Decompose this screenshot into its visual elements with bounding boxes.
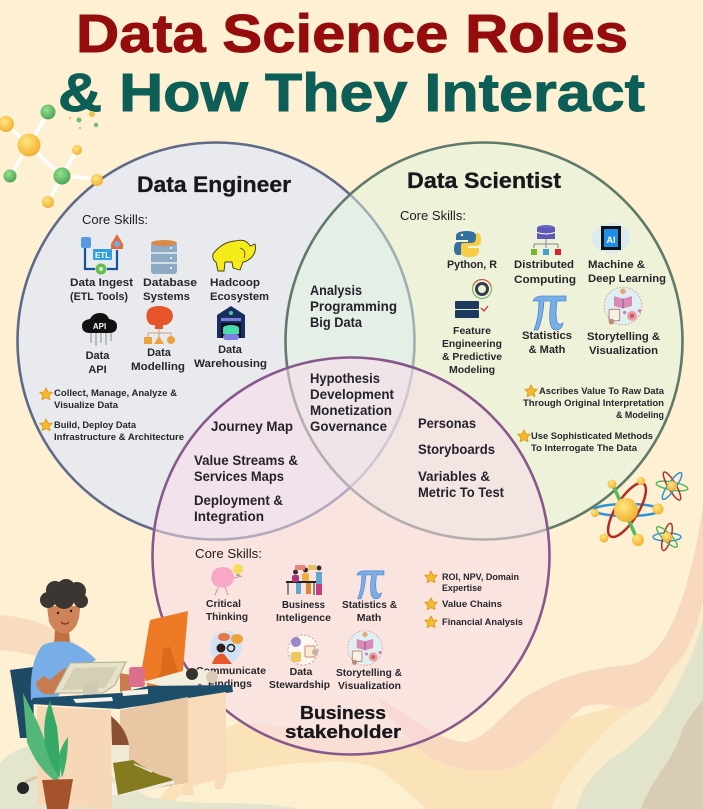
- overlap text: engineer and scientist: [310, 283, 397, 330]
- overlap text: scientist and business: Personas: [418, 416, 476, 431]
- icon: storytelling: [604, 287, 642, 325]
- label: statistics and math: & Math: [529, 344, 566, 356]
- panel: data scientist circle: [286, 142, 682, 540]
- label: storytelling and visualization: [336, 667, 402, 692]
- bullets: data scientist: Use Sophisticated Methods: [531, 431, 653, 442]
- chair: [10, 667, 34, 738]
- panel: data engineer circle: [18, 142, 414, 540]
- label: hadoop: [210, 277, 269, 303]
- bullets: data scientist: & Modeling: [616, 410, 664, 421]
- heading: business stakeholder: [285, 703, 401, 742]
- overlap text: engineer and scientist: Analysis: [310, 283, 362, 298]
- cables and accessories: [143, 669, 214, 688]
- label: storytelling and visualization: Storytelling &: [587, 331, 660, 343]
- label: data api: API: [88, 364, 107, 376]
- overlap text: engineer and scientist: Programming: [310, 299, 397, 314]
- face: [47, 606, 80, 633]
- icon: communicate findings: [210, 631, 243, 664]
- overlap text: all three roles: Hypothesis: [310, 371, 380, 386]
- heading: core skills: Core Skills:: [82, 212, 148, 227]
- icon: data modelling: [144, 306, 175, 344]
- icon: storytelling: [348, 631, 382, 665]
- bullets: data scientist: To Interrogate The Data: [531, 443, 638, 454]
- label: data api: [86, 350, 110, 376]
- heading: core skills: Core Skills:: [400, 208, 466, 223]
- label: data modelling: Data: [147, 347, 172, 359]
- icon: feature engineering: [455, 280, 492, 318]
- label: data stewardship: Data: [290, 666, 313, 678]
- icon: data stewardship: [288, 635, 318, 665]
- label: data ingest: Data Ingest: [70, 277, 133, 289]
- heading: data scientist: Data Scientist: [407, 168, 562, 193]
- desk screen: [54, 662, 126, 693]
- bullets: business stakeholder: Financial Analysis: [442, 617, 523, 628]
- label: communicate findings: [196, 665, 266, 690]
- overlap text: scientist and business: [418, 416, 504, 500]
- label: feature engineering: [442, 325, 502, 376]
- bullets: data engineer: Collect, Manage, Analyze &: [54, 388, 177, 399]
- label: feature engineering: & Predictive: [442, 351, 502, 363]
- bullets: data scientist: Ascribes Value To Raw Data: [539, 386, 665, 397]
- mug: [129, 667, 145, 687]
- label: critical thinking: [206, 598, 248, 623]
- label: critical thinking: Critical: [206, 598, 241, 610]
- label: feature engineering: Engineering: [442, 338, 502, 350]
- icon: pi symbol: [533, 296, 566, 330]
- neck: [54, 630, 70, 645]
- overlap text: engineer and business: Integration: [194, 509, 264, 524]
- label: communicate findings: Communicate: [196, 665, 266, 677]
- label: storytelling and visualization: Visualization: [589, 345, 658, 357]
- overlap text: engineer and business: Services Maps: [194, 469, 284, 484]
- label: machine and deep learning: Deep Learning: [588, 273, 666, 285]
- overlap text: engineer and business: Value Streams &: [194, 453, 298, 468]
- title: Data Science Roles: [76, 5, 628, 64]
- label: python r: Python, R: [447, 259, 497, 271]
- label: distributed computing: Distributed: [514, 259, 574, 271]
- overlap text: engineer and business: Deployment &: [194, 493, 283, 508]
- label: feature engineering: Modeling: [449, 364, 495, 376]
- label: data stewardship: [269, 666, 330, 691]
- overlap text: all three roles: Development: [310, 387, 394, 402]
- label: statistics and math: Math: [357, 612, 381, 624]
- label: business intelligence: Inteligence: [276, 612, 331, 624]
- illustration: person at desk: [10, 579, 233, 809]
- overlap text: engineer and scientist: Big Data: [310, 315, 362, 330]
- icon: data warehouse: [217, 306, 245, 340]
- title: & How They Interact: [58, 64, 645, 123]
- label: distributed computing: Computing: [514, 274, 576, 286]
- label: data warehousing: [194, 344, 267, 370]
- icon: business intelligence: [286, 565, 322, 595]
- icon: API cloud: API: [93, 322, 106, 331]
- label: data api: Data: [86, 350, 110, 362]
- overlap text: scientist and business: Storyboards: [418, 442, 495, 457]
- icon: database: [151, 240, 177, 274]
- leg: [111, 716, 129, 745]
- label: storytelling and visualization: Storytelling &: [336, 667, 402, 679]
- label: machine and deep learning: [588, 259, 666, 285]
- label: storytelling and visualization: Visualization: [338, 680, 401, 692]
- title: [58, 5, 645, 123]
- label: data warehousing: Data: [218, 344, 243, 356]
- label: data ingest: [70, 277, 133, 303]
- overlap text: all three roles: Governance: [310, 419, 387, 434]
- icon: atoms right: [591, 470, 688, 552]
- back monitor: [142, 611, 188, 688]
- desk left panel: [37, 706, 112, 809]
- label: data modelling: [131, 347, 185, 373]
- icon: AI chip: [592, 223, 630, 253]
- label: data modelling: Modelling: [131, 361, 185, 373]
- heading: core skills: Core Skills:: [195, 546, 262, 561]
- plant: [23, 693, 58, 782]
- bullets: business stakeholder: Value Chains: [442, 599, 502, 610]
- label: critical thinking: Thinking: [206, 611, 248, 623]
- bullets: business stakeholder: ROI, NPV, Domain: [442, 572, 519, 583]
- desk right panel: [183, 692, 226, 795]
- overlap text: engineer and business: Journey Map: [211, 419, 293, 434]
- label: distributed computing: [514, 259, 576, 286]
- overlap text: all three roles: Monetization: [310, 403, 392, 418]
- arm: [36, 668, 72, 694]
- label: statistics and math: Statistics &: [342, 599, 397, 611]
- bullets: data engineer: Infrastructure & Architecture: [54, 432, 184, 443]
- label: machine and deep learning: Machine &: [588, 259, 645, 271]
- second shoe: [112, 783, 122, 795]
- shoe: [113, 760, 174, 795]
- heading: data engineer: Data Engineer: [137, 172, 291, 197]
- label: statistics and math: [522, 330, 572, 356]
- label: database systems: Systems: [143, 291, 190, 303]
- bullets: data engineer: Visualize Data: [54, 400, 119, 411]
- label: statistics and math: Statistics: [522, 330, 572, 342]
- label: communicate findings: Findings: [208, 678, 252, 690]
- icon: critical thinking: [211, 564, 243, 595]
- label: storytelling and visualization: [587, 331, 660, 357]
- background waves: [0, 507, 703, 809]
- icon: distributed computing: [531, 225, 561, 255]
- label: hadoop: Ecosystem: [210, 291, 269, 303]
- bullets: data engineer: Build, Deploy Data: [54, 420, 137, 431]
- icon: ETL: ETL: [95, 251, 110, 260]
- icon: AI chip: AI: [606, 235, 616, 245]
- icon: pi symbol: [357, 571, 384, 599]
- label: data ingest: (ETL Tools): [70, 291, 128, 303]
- overlap text: engineer and business: [194, 419, 298, 524]
- heading: business stakeholder: stakeholder: [285, 722, 401, 742]
- icon: API cloud: [82, 313, 117, 346]
- bullets: data engineer: [40, 388, 184, 443]
- label: hadoop: Hadcoop: [210, 277, 260, 289]
- bullets: data scientist: Through Original Interpretation: [523, 398, 664, 409]
- icon: python: [454, 231, 481, 257]
- overlap text: scientist and business: Variables &: [418, 469, 490, 484]
- overlap text: all three roles: [310, 371, 394, 434]
- heading: business stakeholder: Business: [300, 703, 386, 723]
- label: database systems: Database: [143, 277, 197, 289]
- shirt: [31, 641, 96, 700]
- icon: ETL: [81, 234, 123, 274]
- desk top: [31, 685, 233, 709]
- panel: business stakeholder circle: [152, 358, 550, 754]
- label: database systems: [143, 277, 197, 303]
- bullets: business stakeholder: Expertise: [442, 583, 482, 594]
- overlap text: scientist and business: Metric To Test: [418, 485, 504, 500]
- hair: [40, 579, 88, 609]
- icon: molecule top left: [0, 104, 103, 208]
- bullets: business stakeholder: [425, 571, 523, 628]
- label: feature engineering: Feature: [453, 325, 491, 337]
- label: data warehousing: Warehousing: [194, 358, 267, 370]
- desk middle panel: [120, 697, 188, 792]
- icon: hadoop elephant: [213, 240, 256, 271]
- label: business intelligence: Business: [282, 599, 325, 611]
- label: statistics and math: [342, 599, 397, 624]
- label: business intelligence: [276, 599, 331, 624]
- bullets: data scientist: [518, 385, 665, 454]
- label: data stewardship: Stewardship: [269, 679, 330, 691]
